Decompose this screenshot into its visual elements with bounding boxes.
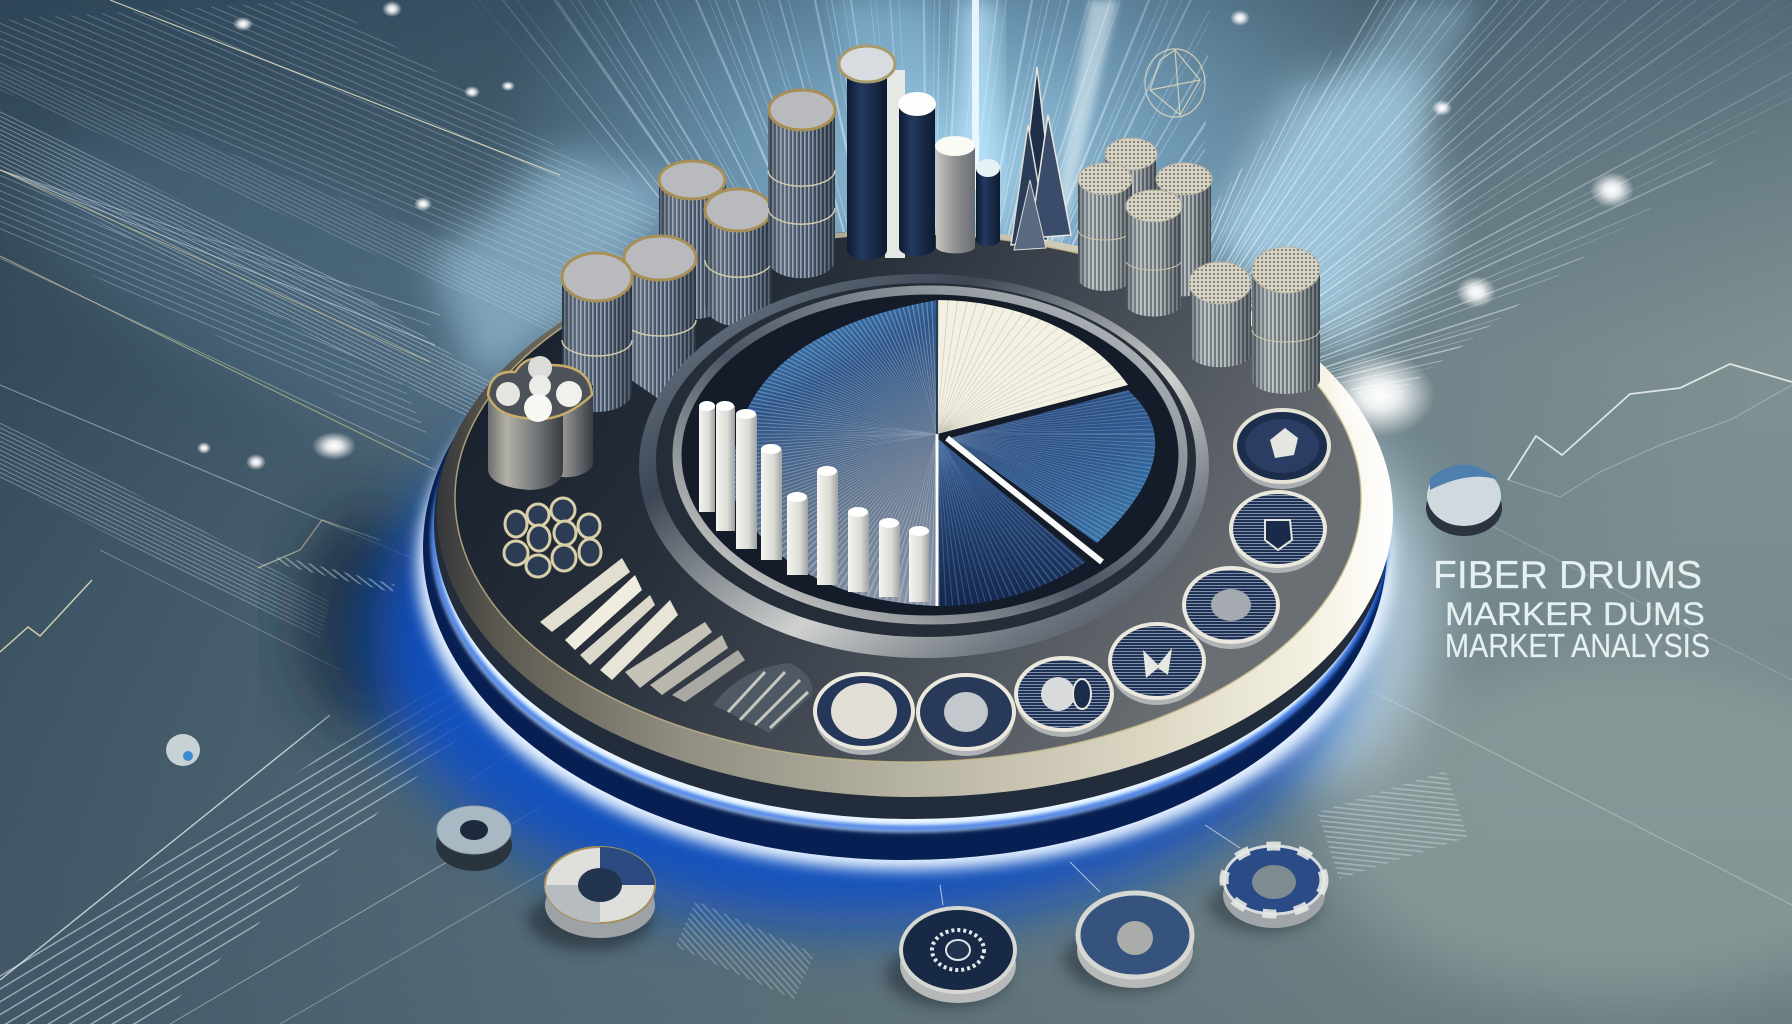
cylinder group: centre navy and white xyxy=(839,46,1000,260)
connector lines from platform to discs xyxy=(940,825,1240,905)
streak band: lower left xyxy=(0,655,600,1024)
cylinder 4 xyxy=(705,189,772,326)
medallion 4 xyxy=(1110,624,1204,705)
mesh cylinder c xyxy=(1156,163,1212,296)
glow behind right cylinders xyxy=(1210,60,1440,360)
bar 7 xyxy=(848,507,869,592)
streak band: mid left xyxy=(0,385,440,670)
navy tall cylinder xyxy=(839,46,905,260)
canister with spheres xyxy=(488,356,593,490)
mesh cylinder e xyxy=(1189,262,1251,367)
platform top plate xyxy=(455,234,1361,762)
cylinder group: left ribbed xyxy=(562,90,835,412)
icon: crystal tree xyxy=(1011,67,1071,250)
cylinder 2 xyxy=(624,236,696,400)
cylinder group: right mesh xyxy=(1078,138,1320,394)
pie chart xyxy=(735,300,1156,606)
medallion 5 xyxy=(1016,658,1112,737)
pie divider: white strip xyxy=(947,438,1102,562)
floor disc 6: crystal lens xyxy=(1426,464,1502,536)
light rays: top fan xyxy=(470,0,1210,245)
medallion 7 xyxy=(815,674,913,755)
icon: wire ball xyxy=(1145,49,1205,117)
mesh cylinder a xyxy=(1105,138,1157,230)
bar 8 xyxy=(879,518,900,597)
streak band: upper left xyxy=(0,0,660,470)
pie slice: cream xyxy=(938,300,1128,434)
floor disc 4 xyxy=(1063,893,1193,992)
title line 1: FIBER DRUMS xyxy=(1433,554,1702,597)
gray white-capped cylinder xyxy=(935,136,975,253)
medallion 6 xyxy=(918,675,1014,756)
bar 9 xyxy=(909,526,929,602)
diagonal stripe swatch xyxy=(540,558,745,702)
pie slice: left xyxy=(735,300,936,606)
floor disc 1 xyxy=(436,806,512,871)
pie divider: vertical xyxy=(936,434,938,606)
spheres xyxy=(496,356,582,422)
cylinder 1 xyxy=(562,253,632,412)
navy white-capped cylinder xyxy=(898,92,936,256)
floor disc 3 xyxy=(886,908,1016,1007)
bar 5 xyxy=(787,492,808,575)
medallion 1 xyxy=(1235,410,1329,489)
glare at platform edge xyxy=(1325,353,1435,437)
glow behind left cylinders xyxy=(430,150,680,390)
floor disc 5 xyxy=(1208,846,1325,933)
cylinder 5 xyxy=(768,90,835,278)
platform metal rim xyxy=(437,229,1393,797)
small navy cylinder xyxy=(976,159,1000,246)
data note: left xyxy=(276,556,394,592)
title line 2: MARKER DUMS xyxy=(1445,596,1705,632)
faint lines: lower right xyxy=(1370,520,1792,905)
mesh cylinder f xyxy=(1252,247,1320,394)
bar 6 xyxy=(817,466,838,585)
line chart: right xyxy=(1508,364,1792,497)
medallion 2 xyxy=(1231,492,1325,573)
floor disc 2 xyxy=(528,847,655,950)
bar 3 xyxy=(736,409,757,549)
bar 4 xyxy=(761,444,782,560)
medallion: row on platform xyxy=(815,410,1329,756)
cylinder 3 xyxy=(659,161,726,319)
light rays: right fan xyxy=(1130,0,1530,430)
light orbs xyxy=(197,1,1634,470)
bar 2 xyxy=(716,401,735,531)
pie slice: bottom xyxy=(938,439,1086,606)
shadow and blue glow under platform xyxy=(300,260,1430,925)
data note: lower right xyxy=(1317,771,1467,879)
mesh cylinder d xyxy=(1126,190,1182,317)
bar 1 xyxy=(699,401,715,512)
central ring xyxy=(639,274,1209,658)
title line 3: MARKET ANALYSIS xyxy=(1445,627,1710,664)
mesh cylinder b xyxy=(1078,163,1132,291)
small lens bead xyxy=(166,734,200,766)
pie slice: right xyxy=(951,390,1156,543)
pie divider: top xyxy=(936,300,938,434)
line chart: left xyxy=(0,520,380,652)
data note: lower centre xyxy=(675,901,815,999)
hatched leaf swatch xyxy=(713,663,812,733)
small ring cluster xyxy=(504,498,601,577)
bar chart inside pie xyxy=(699,401,929,602)
platform base xyxy=(423,229,1390,860)
title text xyxy=(1433,554,1710,664)
medallion 3 xyxy=(1184,568,1278,649)
